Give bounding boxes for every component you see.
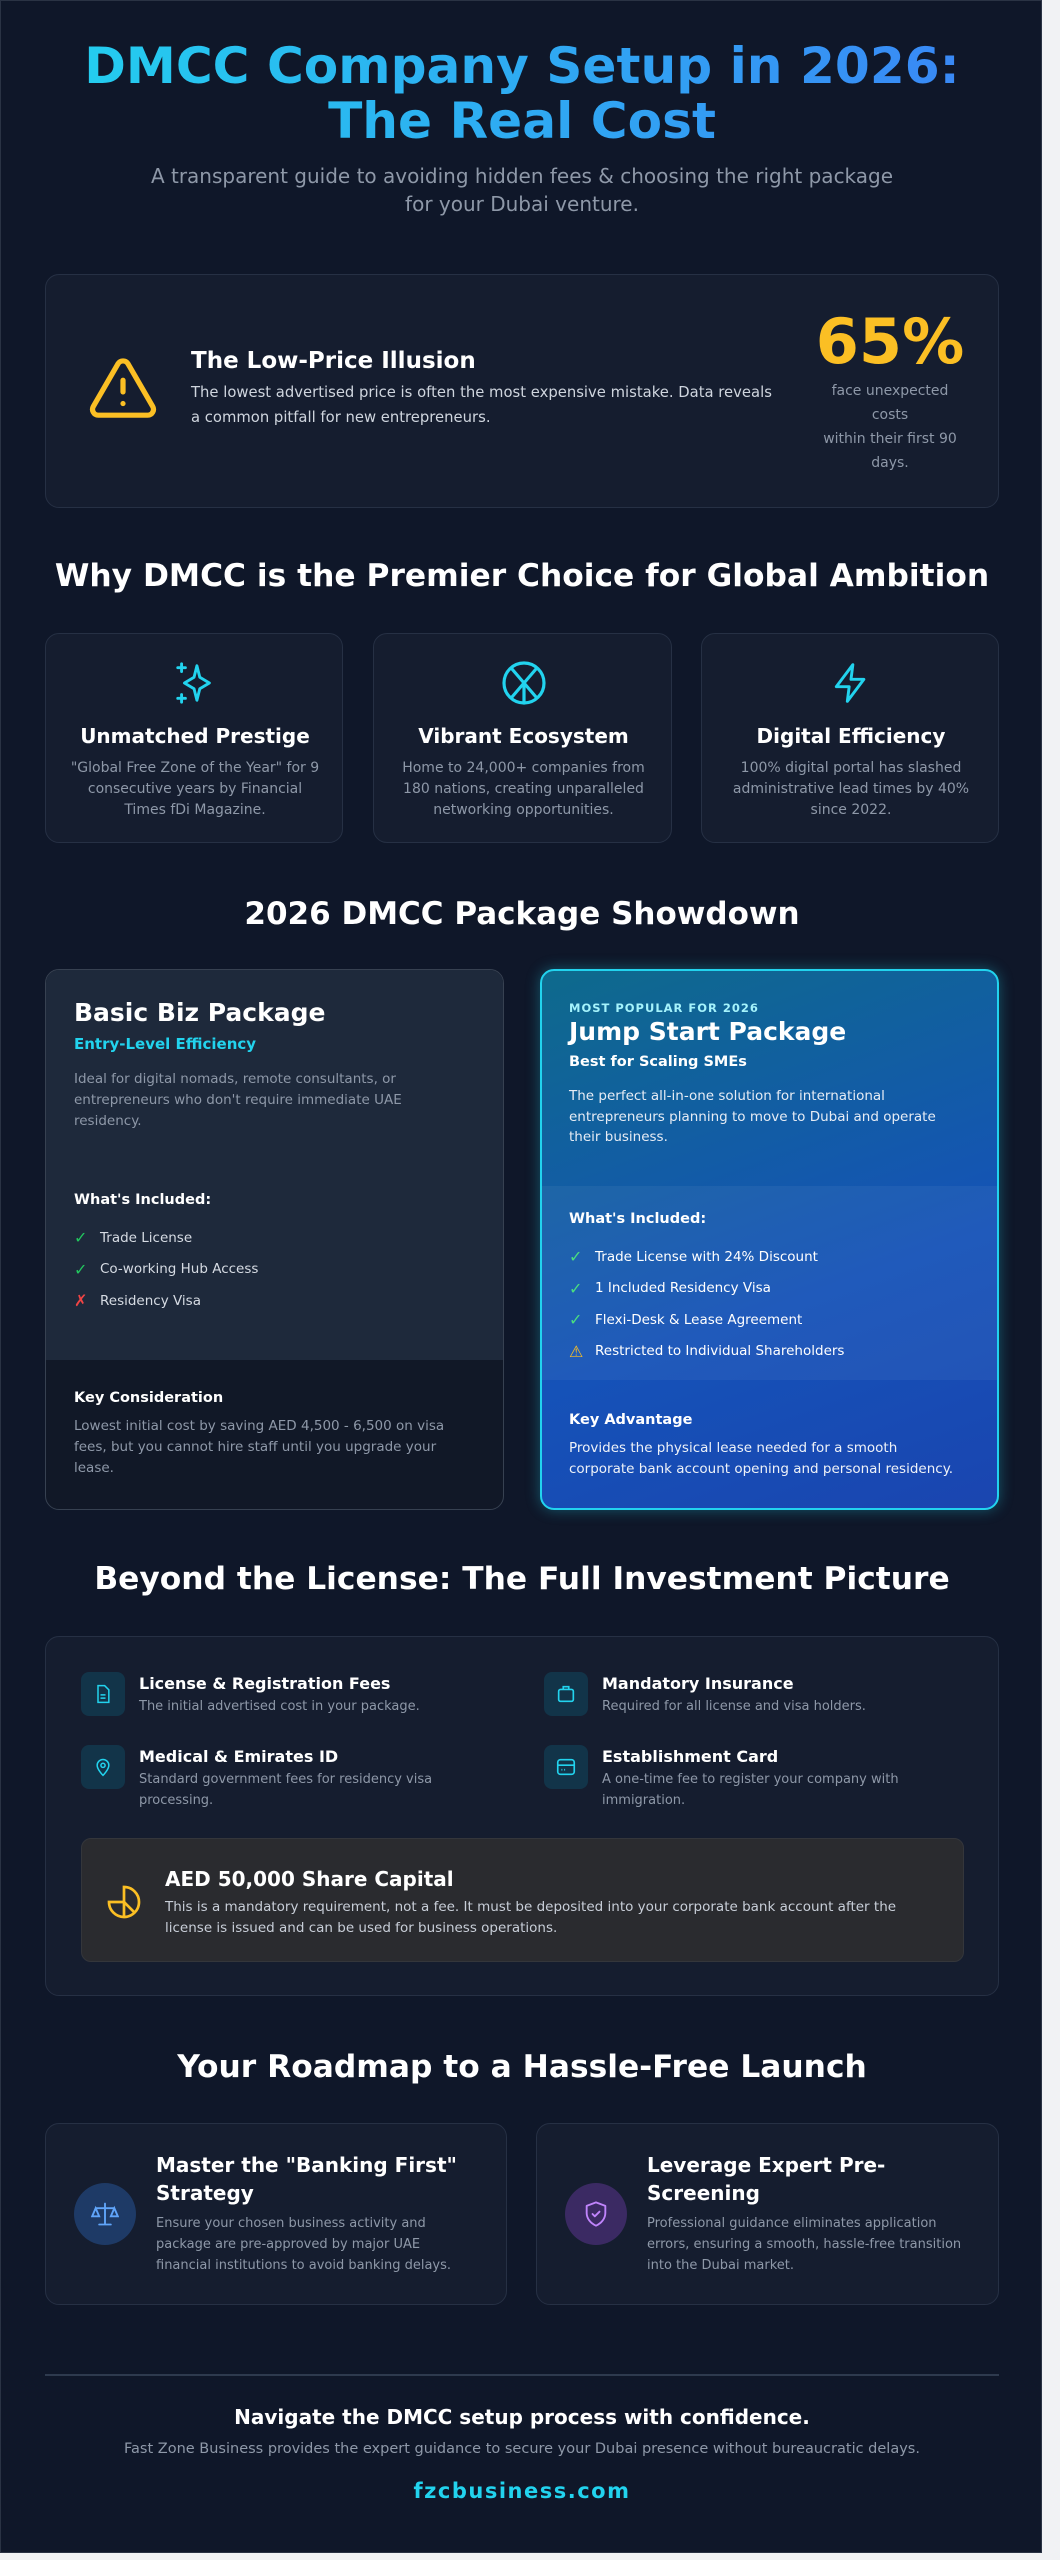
text: jump header: Best for Scaling SMEs	[569, 1054, 747, 1070]
item: license fees: The initial advertised cost in your package.	[139, 1699, 420, 1714]
footer: closing message: Fast Zone Business provides the expert guidance to secure your Dubai presence without bureaucratic delays.	[124, 2441, 920, 2457]
heading: roadmap: Your Roadmap to a Hassle-Free Launch	[177, 2049, 867, 2085]
text: key consideration	[74, 1390, 444, 1476]
text: illusion heading: a common pitfall for new entrepreneurs.	[191, 409, 491, 426]
footer: closing message: fzcbusiness.com	[414, 2479, 630, 2503]
panel: vibrant ecosystem	[373, 633, 672, 843]
panel: banking first: Master the "Banking First" Strategy	[156, 2153, 457, 2205]
icon: warning	[90, 358, 156, 418]
panel: digital efficiency: Digital Efficiency	[757, 724, 945, 748]
callout: share capital	[81, 1838, 964, 1962]
icon: lightning	[834, 663, 866, 703]
panel: banking first: Ensure your chosen business activity and package are pre-approved by major UAE financial institutions to avoid banking delays.	[156, 2216, 451, 2273]
item: medical: Medical & Emirates ID	[139, 1747, 338, 1766]
icon: pie chart	[108, 1886, 140, 1918]
title	[1, 38, 1043, 148]
footer: closing message	[124, 2405, 920, 2503]
text: key advantage	[569, 1412, 953, 1477]
list: basic included: ✓	[74, 1228, 87, 1247]
list: jump included: What's Included:	[569, 1211, 706, 1227]
text: jump header: MOST POPULAR FOR 2026	[569, 1001, 759, 1015]
list: jump included: 1 Included Residency Visa	[595, 1280, 771, 1296]
list: jump included: Restricted to Individual Shareholders	[595, 1343, 844, 1359]
list: basic included	[74, 1192, 258, 1310]
panel: basic biz package	[45, 969, 504, 1510]
panel: jump start package	[540, 969, 999, 1510]
list: jump included: ✓	[569, 1310, 582, 1329]
text: jump header: Jump Start Package	[569, 1017, 846, 1046]
callout: share capital: AED 50,000 Share Capital	[165, 1867, 454, 1891]
subtitle	[151, 164, 893, 216]
text: key advantage: Provides the physical lease needed for a smooth corporate bank account opening and personal residency.	[569, 1440, 953, 1477]
stat: 65%: days.	[871, 455, 909, 471]
item: medical	[81, 1745, 432, 1808]
text: basic header: Basic Biz Package	[74, 998, 325, 1027]
title: The Real Cost	[328, 91, 716, 150]
text: key consideration: Lowest initial cost by saving AED 4,500 - 6,500 on visa fees, but you cannot hire staff until you upgrade your lease.	[74, 1418, 444, 1476]
text: illusion heading: The lowest advertised price is often the most expensive mistake. Data reveals	[191, 384, 772, 401]
text: jump header	[568, 1001, 936, 1145]
list: jump included: Trade License with 24% Discount	[595, 1249, 818, 1265]
panel: expert pre-screening: Screening	[647, 2181, 760, 2205]
text: jump header: The perfect all-in-one solution for international entrepreneurs planning to move to Dubai and operate their business.	[569, 1088, 936, 1145]
item: insurance	[544, 1672, 866, 1716]
title: DMCC Company Setup in 2026:	[84, 36, 960, 95]
panel: banking first	[45, 2123, 507, 2305]
list: basic included: What's Included:	[74, 1192, 211, 1208]
icon: shield	[565, 2183, 627, 2245]
panel: expert pre-screening	[536, 2123, 999, 2305]
text: basic header: Ideal for digital nomads, remote consultants, or entrepreneurs who don't require immediate UAE residency.	[74, 1071, 402, 1129]
item: establishment card: A one-time fee to register your company with immigration.	[602, 1772, 899, 1808]
subtitle: A transparent guide to avoiding hidden fees & choosing the right package	[151, 164, 893, 188]
callout: share capital: This is a mandatory requirement, not a fee. It must be deposited into your corporate bank account after the license is issued and can be used for business operations.	[165, 1899, 896, 1936]
item: establishment card: Establishment Card	[602, 1747, 778, 1766]
list: jump included	[569, 1211, 844, 1361]
panel: expert pre-screening: Professional guidance eliminates application errors, ensuring a smooth, hassle-free transition into the Dubai market.	[647, 2216, 961, 2273]
footer: closing message: Navigate the DMCC setup process with confidence.	[234, 2405, 810, 2429]
panel: vibrant ecosystem: Home to 24,000+ companies from 180 nations, creating unparalleled networking opportunities.	[402, 760, 645, 818]
item: medical: Standard government fees for residency visa processing.	[139, 1772, 432, 1808]
panel: low-price illusion	[45, 274, 999, 508]
item: license fees	[81, 1672, 420, 1716]
list: basic included: ✗	[74, 1291, 87, 1310]
item: insurance: Mandatory Insurance	[602, 1674, 794, 1693]
panel: digital efficiency: 100% digital portal has slashed administrative lead times by 40% since 2022.	[733, 760, 969, 818]
item: license fees: License & Registration Fees	[139, 1674, 390, 1693]
heading: why DMCC: Why DMCC is the Premier Choice for Global Ambition	[55, 558, 989, 594]
item: establishment card	[544, 1745, 899, 1808]
text: basic header: Entry-Level Efficiency	[74, 1035, 256, 1053]
panel: unmatched prestige	[45, 633, 343, 843]
list: basic included: ✓	[74, 1260, 87, 1279]
panel: expert pre-screening: Leverage Expert Pre-	[647, 2153, 885, 2177]
text: illusion heading	[190, 348, 772, 426]
stat: 65%: face unexpected	[832, 383, 948, 399]
list: jump included: ⚠	[569, 1342, 583, 1361]
panel: unmatched prestige: "Global Free Zone of the Year" for 9 consecutive years by Financial Times fDi Magazine.	[71, 760, 319, 818]
icon: globe	[502, 661, 546, 705]
stat: 65%	[816, 305, 964, 471]
text: illusion heading: The Low-Price Illusion	[191, 348, 476, 374]
panel: investment picture	[45, 1636, 999, 1996]
subtitle: for your Dubai venture.	[405, 192, 639, 216]
list: jump included: ✓	[569, 1247, 582, 1266]
item: insurance: Required for all license and visa holders.	[602, 1699, 866, 1714]
list: basic included: Trade License	[100, 1230, 192, 1246]
list: basic included: Co-working Hub Access	[100, 1261, 258, 1277]
stat: 65%: within their first 90	[823, 431, 957, 447]
panel: vibrant ecosystem: Vibrant Ecosystem	[418, 724, 629, 748]
panel: digital efficiency	[701, 633, 999, 843]
panel: unmatched prestige: Unmatched Prestige	[80, 724, 310, 748]
heading: package showdown: 2026 DMCC Package Showdown	[244, 896, 800, 932]
text: basic header	[74, 998, 402, 1129]
list: jump included: ✓	[569, 1279, 582, 1298]
stat: 65%: 65%	[816, 305, 964, 378]
icon: sparkles	[176, 662, 211, 704]
list: jump included: Flexi-Desk & Lease Agreement	[595, 1312, 802, 1328]
stat: 65%: costs	[872, 407, 908, 423]
text: key advantage: Key Advantage	[569, 1412, 692, 1428]
icon: scales	[74, 2183, 136, 2245]
heading: beyond the license: Beyond the License: The Full Investment Picture	[94, 1561, 950, 1597]
list: basic included: Residency Visa	[100, 1293, 201, 1309]
text: key consideration: Key Consideration	[74, 1390, 223, 1406]
